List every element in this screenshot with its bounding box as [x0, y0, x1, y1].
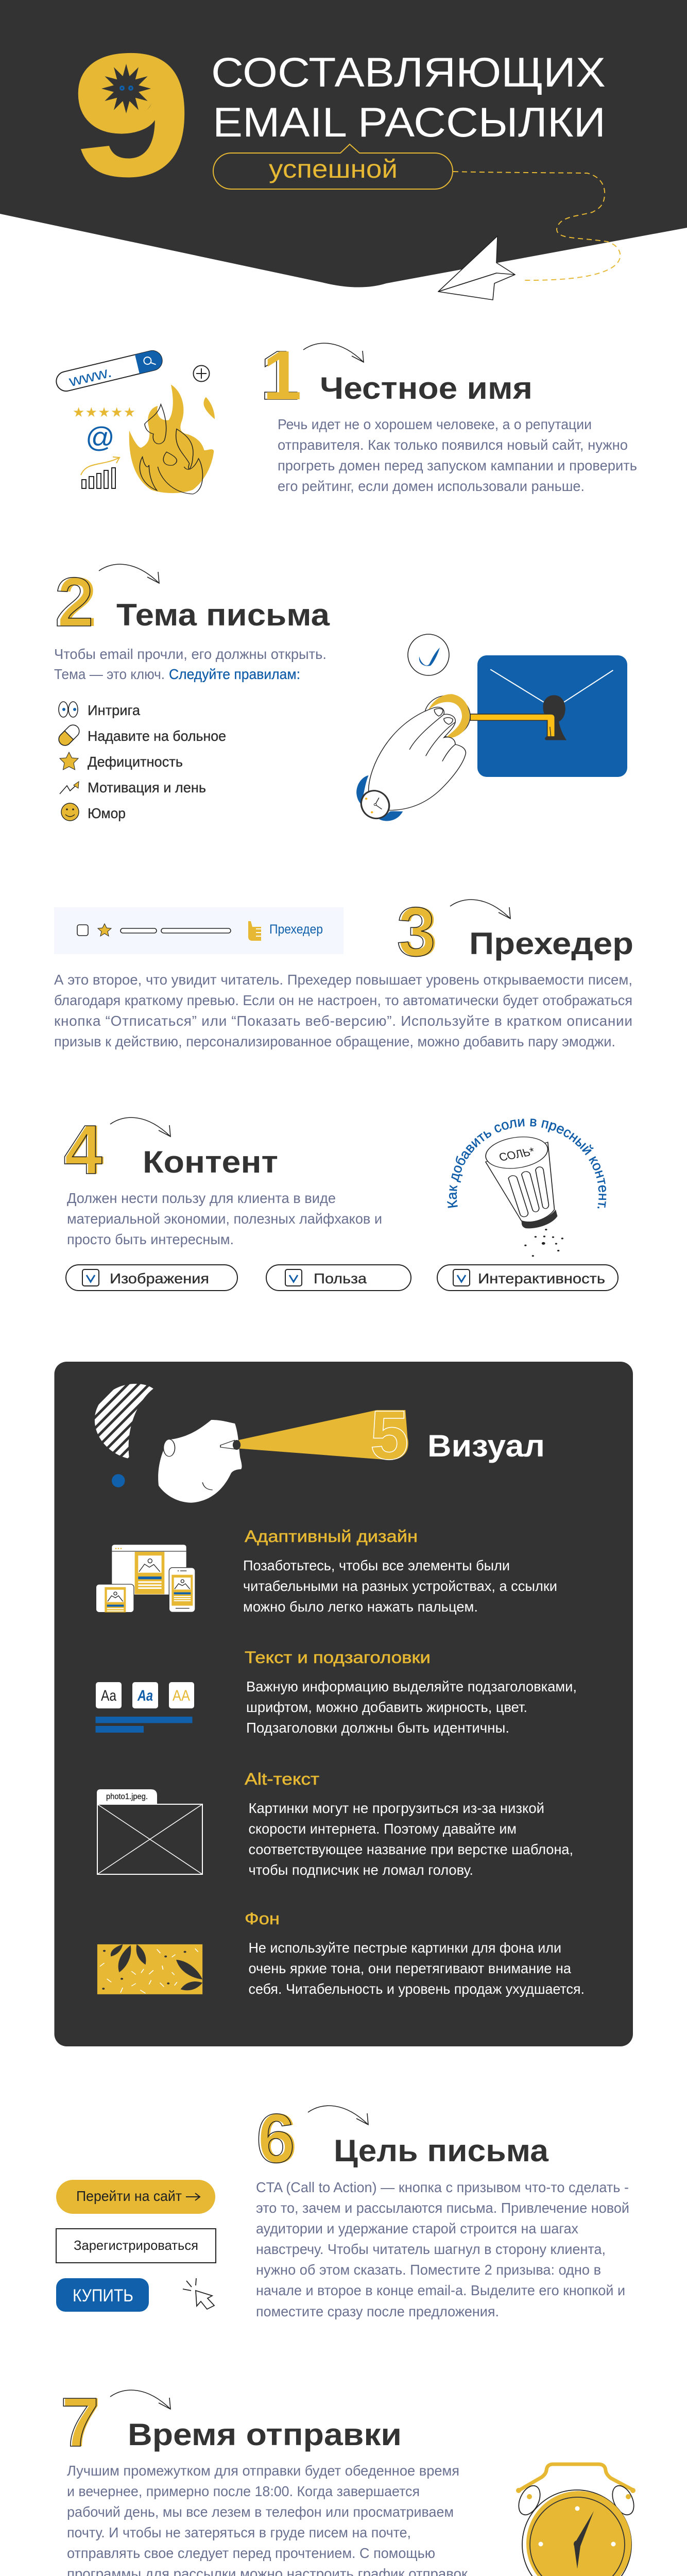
- subtitle pill: [213, 144, 453, 189]
- inbox preview row: [54, 907, 343, 954]
- icon: type samples: Aa: [101, 1687, 116, 1704]
- icon: broken image: [97, 1789, 202, 1874]
- number 5: 5: [370, 1396, 409, 1474]
- item: text and subheadings: Подзаголовки должны быть идентичны.: [246, 1720, 509, 1736]
- section 7: send time: [60, 2383, 638, 2576]
- number 4: 4: [65, 1111, 104, 1189]
- number 1: 1: [263, 336, 302, 414]
- item: background: Не используйте пестрые картинки для фона или: [248, 1940, 561, 1956]
- icon: search bar: www.: [67, 363, 113, 390]
- icon: growth arrow: [81, 457, 119, 475]
- text block: начале и второе в конце email-а. Выделите его кнопкой и: [256, 2282, 625, 2298]
- heading: Визуал: [427, 1429, 545, 1463]
- title: EMAIL РАССЫЛКИ: [213, 99, 606, 146]
- watch: [357, 787, 393, 822]
- text block: поместите сразу после предложения.: [256, 2303, 499, 2319]
- number 1: 1: [260, 336, 299, 414]
- icon: type samples: [96, 1682, 194, 1733]
- number 6: 6: [256, 2099, 295, 2177]
- arrow: [99, 564, 159, 583]
- button: register: [56, 2229, 216, 2263]
- face: [158, 1420, 242, 1503]
- text block: [54, 646, 327, 682]
- text block: кнопка “Отписаться” или “Показать веб-версию”. Используйте в кратком описании: [54, 1013, 632, 1029]
- item: adaptive design: можно было легко нажать пальцем.: [243, 1599, 478, 1615]
- curved caption: Как добавить соли в пресный контент.: [447, 1118, 607, 1209]
- section 2: subject: [54, 563, 627, 822]
- section 1: honest name: [54, 336, 637, 494]
- text block: прогреть домен перед запуском кампании и проверить: [278, 457, 637, 473]
- text block: благодаря краткому превью. Если он не настроен, то автоматически будет отображаться: [54, 992, 632, 1008]
- text block: Следуйте правилам:: [169, 666, 300, 682]
- text block: Речь идет не о хорошем человеке, а о репутации: [278, 416, 592, 432]
- item: adaptive design: Позаботьтесь, чтобы все элементы были: [243, 1557, 510, 1573]
- key: [470, 714, 555, 737]
- text block: навстречу. Чтобы читатель шагнул в сторону клиента,: [256, 2241, 606, 2257]
- number 2: 2: [58, 563, 97, 641]
- icon: type samples: AA: [173, 1687, 190, 1704]
- text block: [67, 1190, 382, 1247]
- arrow: [110, 2390, 170, 2409]
- text block: отправлять свое следует перед прочтением. С помощью: [67, 2545, 435, 2561]
- chip: images: [66, 1265, 237, 1291]
- icon: star: [60, 752, 78, 770]
- button: go to site: Перейти на сайт: [76, 2188, 182, 2204]
- icon: pill: [56, 722, 82, 748]
- heading: Честное имя: [320, 371, 533, 405]
- chip: interactivity: Интерактивность: [478, 1270, 605, 1286]
- heading: Текст и подзаголовки: [245, 1648, 431, 1667]
- number 7: 7: [60, 2383, 99, 2461]
- icon: paper plane: [438, 236, 515, 300]
- number 3: 3: [399, 893, 438, 971]
- heading: Цель письма: [334, 2133, 549, 2168]
- text block: почту. И чтобы не затеряться в груде писем на почте,: [67, 2524, 411, 2540]
- title: СОСТАВЛЯЮЩИХ: [211, 49, 606, 96]
- list: rules: Мотивация и лень: [88, 779, 206, 795]
- button: buy: [56, 2278, 149, 2312]
- text block: [256, 2179, 629, 2319]
- arrow: [110, 1117, 170, 1137]
- icon: flame: [129, 384, 215, 494]
- arrow: [308, 2106, 368, 2125]
- text block: Чтобы email прочли, его должны открыть.: [54, 646, 327, 662]
- list: rules: Интрига: [88, 702, 140, 718]
- item: alt text: скорости интернета. Поэтому давайте им: [248, 1821, 517, 1837]
- section 3: preheader: [54, 893, 633, 1049]
- icon: salt shaker: [481, 1132, 563, 1257]
- list: rules: Дефицитность: [88, 754, 183, 770]
- title: [211, 49, 606, 146]
- number 5: 5: [371, 1396, 410, 1474]
- arrow: [303, 343, 364, 362]
- text block: это то, зачем и рассылаются письма. Привлечение новой: [256, 2200, 629, 2216]
- number 2: 2: [55, 563, 94, 641]
- keyhole: [543, 695, 566, 740]
- number 6: 6: [258, 2099, 297, 2177]
- item: alt text: чтобы подписчик не ломал голову.: [248, 1862, 473, 1878]
- illustration: envelope and key: [356, 655, 627, 822]
- text block: нужно об этом сказать. Поместите 2 призыва: одно в: [256, 2262, 601, 2278]
- item: alt text: соответствующее название при верстке шаблона,: [248, 1841, 573, 1857]
- dashed flight path: [453, 172, 620, 280]
- icon: at sign: @: [85, 421, 115, 453]
- button: go to site: [56, 2180, 215, 2214]
- number 7: 7: [62, 2383, 101, 2461]
- watch strap: [356, 775, 403, 821]
- list: rules: Юмор: [88, 805, 126, 821]
- arrow: [450, 900, 510, 919]
- text block: Лучшим промежутком для отправки будет обеденное время: [67, 2463, 459, 2479]
- subtitle pill: успешной: [269, 155, 398, 183]
- envelope: [477, 655, 627, 777]
- icon: type samples: Aa: [137, 1687, 153, 1704]
- text block: CTA (Call to Action) — кнопка с призывом что-то сделать -: [256, 2179, 629, 2195]
- text block: рабочий день, мы все лезем в телефон или просматриваем: [67, 2504, 454, 2520]
- illustration: domain reputation: [54, 349, 215, 494]
- icon: cursor: [183, 2278, 214, 2309]
- number 4: 4: [63, 1111, 102, 1189]
- heading: Контент: [143, 1145, 278, 1179]
- hand: [369, 707, 466, 810]
- illustration: head with beam: [95, 1384, 408, 1503]
- item: background: себя. Читабельность и уровень продаж ухудшается.: [248, 1981, 585, 1997]
- chip: benefit: [266, 1265, 411, 1291]
- text block: его рейтинг, если домен использовали раньше.: [278, 478, 585, 494]
- chip: benefit: Польза: [314, 1270, 367, 1286]
- icon: thumb up: [248, 921, 261, 941]
- section 6: call to action: [56, 2099, 629, 2319]
- list: rules: [56, 702, 226, 821]
- icon: big yellow nine with star: 9: [71, 17, 193, 213]
- icon: smile: [61, 803, 79, 821]
- item: adaptive design: [96, 1527, 557, 1615]
- icon: busy background: [97, 1944, 202, 1994]
- icon: alarm clock: [514, 2464, 638, 2576]
- text block: отправителя. Как только появился новый сайт, нужно: [278, 437, 628, 453]
- icon: broken image: photo1.jpeg.: [106, 1792, 148, 1801]
- icon: plus circle: [194, 366, 209, 381]
- text block: призыв к действию, персонализированное обращение, можно добавить пару эмоджи.: [54, 1033, 615, 1049]
- icon: rating stars: ★★★★★: [73, 405, 135, 420]
- text block: Тема — это ключ.: [54, 666, 165, 682]
- heading: Время отправки: [128, 2417, 402, 2452]
- text block: просто быть интересным.: [67, 1231, 234, 1247]
- item: background: очень яркие тона, они перетягивают внимание на: [248, 1960, 571, 1976]
- heading: Alt-текст: [245, 1770, 319, 1788]
- panel: visual: [55, 1338, 633, 2046]
- item: adaptive design: читабельными на разных устройствах, а ссылки: [243, 1578, 557, 1594]
- text block: Должен нести пользу для клиента в виде: [67, 1190, 336, 1206]
- text block: аудитории и удержание старой строится на шагах: [256, 2221, 578, 2236]
- icon: striped exclamation: [95, 1384, 153, 1459]
- text block: [54, 972, 632, 1049]
- text block: материальной экономии, полезных лайфхаков и: [67, 1211, 382, 1227]
- number 3: 3: [397, 893, 436, 971]
- button: buy: КУПИТЬ: [73, 2286, 133, 2306]
- heading: Адаптивный дизайн: [245, 1527, 418, 1546]
- header banner: [0, 0, 687, 300]
- item: text and subheadings: [96, 1648, 577, 1736]
- icon: responsive devices: [96, 1545, 195, 1613]
- icon: eyes: [59, 702, 78, 717]
- text block: [67, 2463, 468, 2576]
- heading: Тема письма: [116, 598, 330, 632]
- icon: zigzag arrow: [60, 782, 79, 794]
- button: register: Зарегистрироваться: [74, 2238, 198, 2253]
- text block: и вечернее, примерно после 18:00. Когда завершается: [67, 2483, 420, 2499]
- item: alt text: [97, 1770, 573, 1878]
- heading: Фон: [245, 1909, 280, 1928]
- heading: Прехедер: [469, 926, 633, 961]
- key ring: [424, 696, 470, 737]
- icon: search bar: [54, 349, 164, 393]
- chip: images: Изображения: [110, 1270, 209, 1286]
- icon: check circle: [408, 634, 449, 675]
- text block: [278, 416, 637, 494]
- item: text and subheadings: Важную информацию выделяйте подзаголовками,: [246, 1679, 577, 1694]
- text block: А это второе, что увидит читатель. Прехедер повышает уровень открываемости писем,: [54, 972, 632, 988]
- item: alt text: Картинки могут не прогрузиться из-за низкой: [248, 1800, 544, 1816]
- item: text and subheadings: шрифтом, можно добавить жирность, цвет.: [246, 1699, 527, 1715]
- inbox preview row: Прехедер: [269, 922, 323, 937]
- beam: [239, 1410, 407, 1460]
- item: background: [97, 1909, 585, 1997]
- list: rules: Надавите на больное: [88, 728, 226, 744]
- icon: small bars: [82, 468, 115, 488]
- chip: interactivity: [437, 1265, 618, 1291]
- section 4: content: [63, 1111, 619, 1291]
- icon: salt shaker: СОЛЬ*: [497, 1145, 537, 1164]
